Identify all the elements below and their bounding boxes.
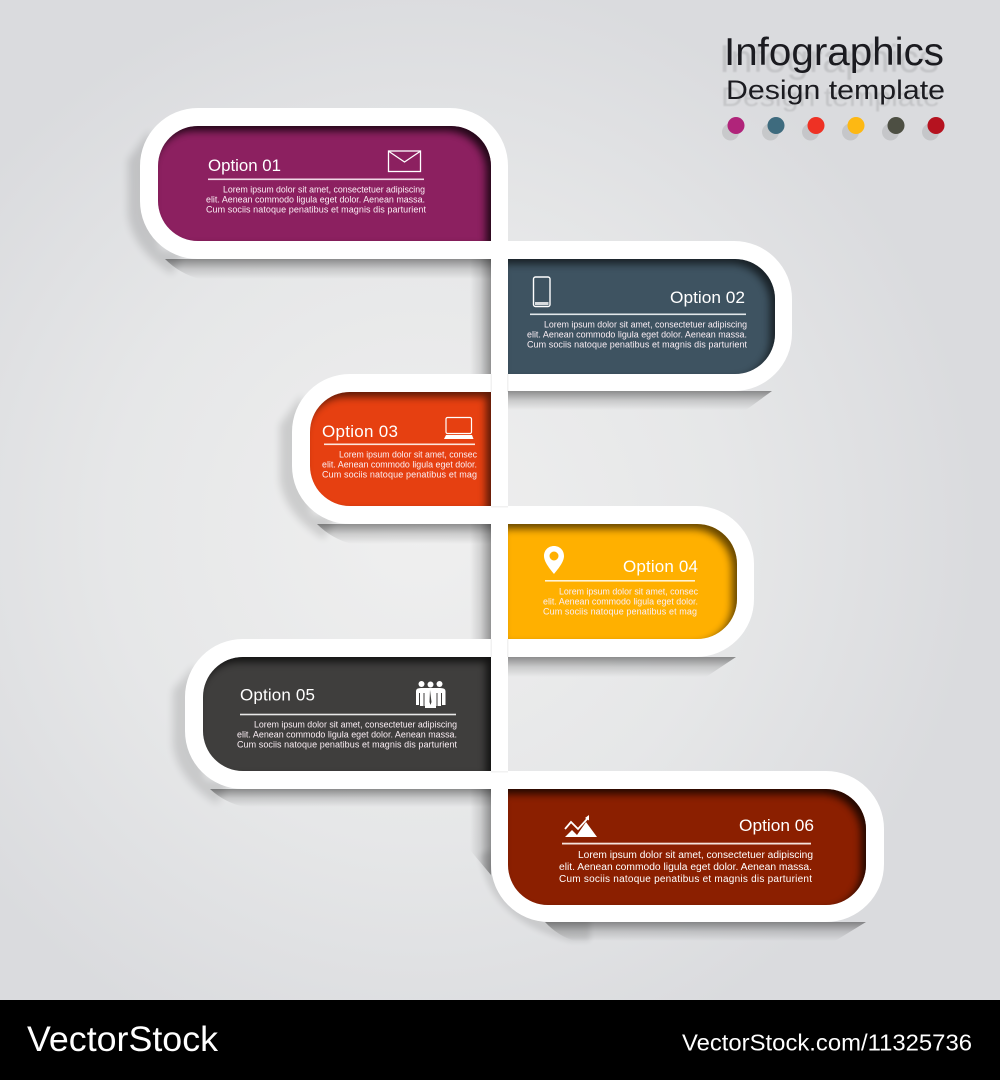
panel 6: Option 06	[508, 789, 866, 905]
icon: phone	[534, 277, 550, 306]
footer bar	[0, 1000, 1000, 1080]
icon: laptop	[444, 418, 474, 439]
panel 6: Option 06: elit. Aenean commodo ligula eget dolor. Aenean massa.	[559, 862, 812, 873]
panel 4: Option 04: Cum sociis natoque penatibus et mag	[543, 606, 697, 616]
panel 3: Option 03: Lorem ipsum dolor sit amet, consec	[339, 450, 477, 460]
heading	[724, 31, 945, 105]
heading shadow: Infographics	[719, 38, 939, 81]
panel 2: Option 02: Lorem ipsum dolor sit amet, consectetuer adipiscing	[544, 320, 747, 330]
panel 5: Option 05: Cum sociis natoque penatibus et magnis dis parturient	[237, 740, 457, 750]
panel 1: Option 01: Lorem ipsum dolor sit amet, consectetuer adipiscing	[223, 184, 425, 194]
panel 1: Option 01	[158, 126, 491, 241]
icon: map pin	[544, 546, 564, 574]
panel 3: Option 03: Cum sociis natoque penatibus et mag	[322, 470, 477, 480]
icon: mountain chart	[565, 815, 597, 837]
icon: group of people	[416, 681, 446, 708]
icon: envelope	[388, 151, 420, 172]
panel 2: Option 02	[508, 259, 775, 374]
drop shadows	[128, 130, 866, 941]
panel 4: Option 04: Option 04	[623, 557, 698, 576]
footer reference: VectorStock.com/11325736	[682, 1030, 972, 1056]
white ribbon connecting the panels	[140, 108, 884, 922]
ribbon crossing creases	[490, 374, 508, 772]
panel 5: Option 05: elit. Aenean commodo ligula eget dolor. Aenean massa.	[237, 730, 457, 740]
panel 3: Option 03	[310, 392, 491, 506]
colour dots	[722, 117, 944, 140]
panel 5: Option 05: Option 05	[240, 686, 315, 704]
panel 1: Option 01: elit. Aenean commodo ligula eget dolor. Aenean massa.	[206, 194, 425, 204]
panel 6: Option 06: Option 06	[739, 816, 814, 835]
panel 6: Option 06: Cum sociis natoque penatibus et magnis dis parturient	[559, 874, 812, 885]
panel 1: Option 01: Cum sociis natoque penatibus et magnis dis parturient	[206, 204, 426, 214]
heading: Design template	[726, 75, 945, 105]
panel 4: Option 04: Lorem ipsum dolor sit amet, consec	[559, 586, 698, 596]
panel 2: Option 02: Cum sociis natoque penatibus et magnis dis parturient	[527, 340, 747, 350]
panel 5: Option 05	[203, 657, 491, 771]
panel 2: Option 02: Option 02	[670, 288, 745, 307]
panel 3: Option 03: elit. Aenean commodo ligula eget dolor.	[322, 460, 477, 470]
panel 4: Option 04: elit. Aenean commodo ligula eget dolor.	[543, 596, 698, 606]
footer logo: VectorStock	[27, 1020, 219, 1059]
panel 3: Option 03: Option 03	[322, 422, 398, 441]
heading shadow	[719, 38, 940, 112]
panel 5: Option 05: Lorem ipsum dolor sit amet, consectetuer adipiscing	[254, 720, 457, 730]
heading: Infographics	[724, 31, 944, 74]
panel 1: Option 01: Option 01	[208, 156, 281, 175]
panel 2: Option 02: elit. Aenean commodo ligula eget dolor. Aenean massa.	[527, 330, 747, 340]
panel 4: Option 04	[508, 524, 737, 639]
panel 6: Option 06: Lorem ipsum dolor sit amet, consectetuer adipiscing	[578, 850, 813, 861]
heading shadow: Design template	[721, 82, 940, 112]
